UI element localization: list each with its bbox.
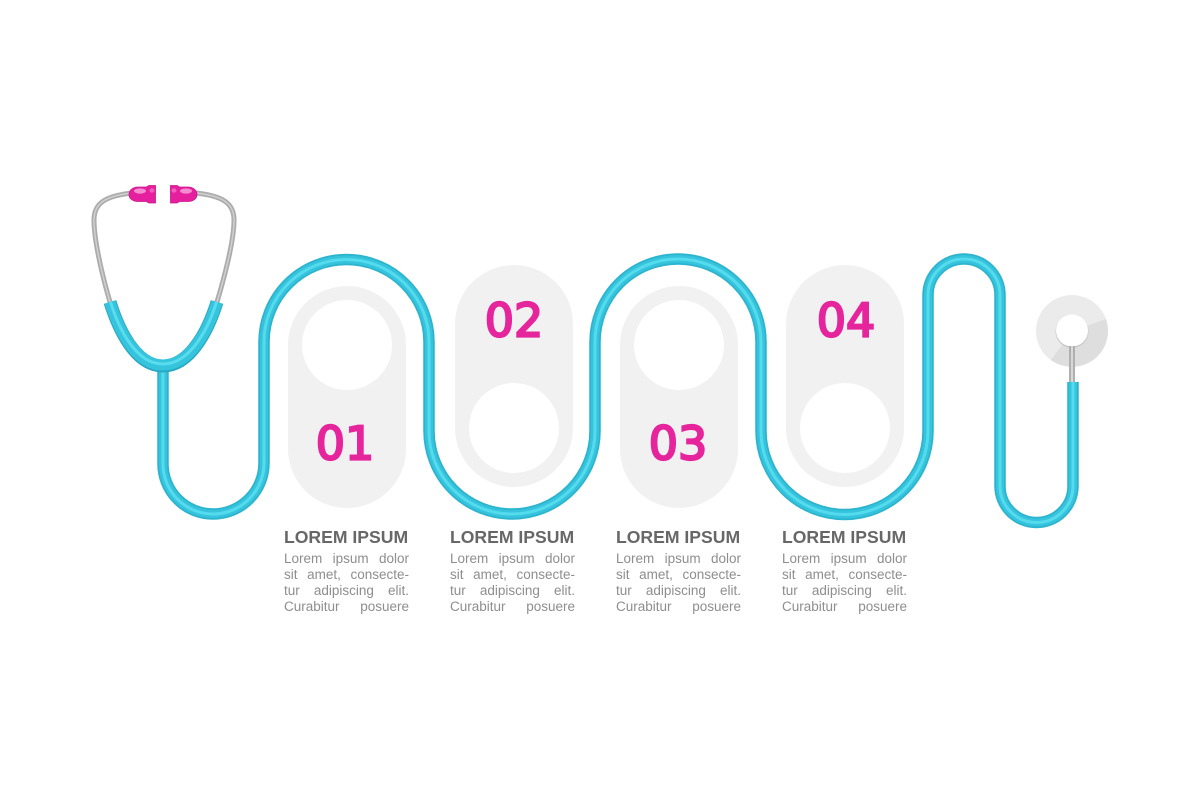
icon: Y-shaped binaural tube [110,302,217,366]
panel: step 02 pill [455,265,573,487]
text block: step 04: Lorem ipsum dolor [782,551,907,566]
text block: step 04: tur adipiscing elit. [782,583,907,598]
text block: step 03: sit amet, consecte- [616,567,741,582]
text block: step 04: sit amet, consecte- [782,567,907,582]
panel: step 04 pill [786,265,904,487]
heading: step 02: LOREM IPSUM [450,527,574,547]
text block: step 02: Curabitur posuere [450,599,575,614]
panel: step 03 pill: 03 [649,416,707,470]
icon: grey ear tubes [94,193,234,302]
text block: step 02: sit amet, consecte- [450,567,575,582]
text block: step 03: Curabitur posuere [616,599,741,614]
text block: step 01: Lorem ipsum dolor [284,551,409,566]
text block: step 01: Curabitur posuere [284,599,409,614]
text block: step 03 [616,527,741,614]
icon: main tube winding path [163,259,1073,522]
text block: step 03: tur adipiscing elit. [616,583,741,598]
panel: step 03 pill [620,286,738,508]
text block: step 02 [450,527,575,614]
icon: left ear tip [129,186,156,203]
text block: step 04 [782,527,907,614]
text block: step 04: Curabitur posuere [782,599,907,614]
heading: step 01: LOREM IPSUM [284,527,408,547]
panel: step 02 pill: 02 [485,294,543,348]
panel: step 01 pill [288,286,406,508]
panel: step 01 pill: 01 [316,416,374,470]
text block: step 02: tur adipiscing elit. [450,583,575,598]
text block: step 03: Lorem ipsum dolor [616,551,741,566]
icon: right ear tip [170,186,197,203]
text block: step 01: sit amet, consecte- [284,567,409,582]
text block: step 01 [284,527,409,614]
heading: step 04: LOREM IPSUM [782,527,906,547]
icon: chest piece disc [1036,295,1108,383]
text block: step 02: Lorem ipsum dolor [450,551,575,566]
text block: step 01: tur adipiscing elit. [284,583,409,598]
panel: step 04 pill: 04 [817,294,875,348]
heading: step 03: LOREM IPSUM [616,527,740,547]
